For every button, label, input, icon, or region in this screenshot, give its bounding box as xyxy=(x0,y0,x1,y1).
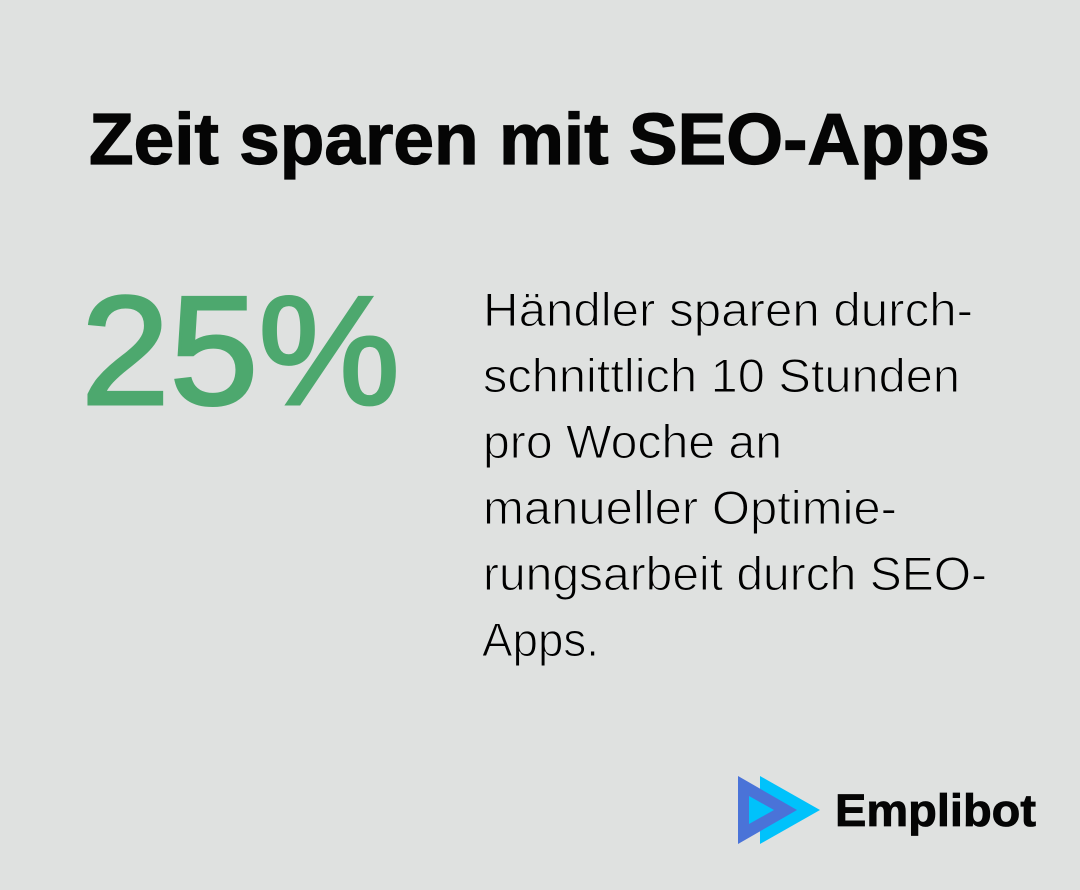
description text block xyxy=(482,283,987,666)
description text block: schnittlich 10 Stunden xyxy=(483,349,960,402)
description text block: Händler sparen durch- xyxy=(483,283,973,336)
title: Zeit sparen mit SEO-Apps xyxy=(89,100,990,180)
description text block: pro Woche an xyxy=(483,415,782,468)
big statistic: 25%: 25% xyxy=(81,264,400,437)
logo: Emplibot xyxy=(738,776,1036,844)
description text block: manueller Optimie- xyxy=(483,481,897,534)
logo wordmark: Emplibot xyxy=(835,785,1036,836)
icon: play triangles xyxy=(738,776,820,844)
description text block: rungsarbeit durch SEO- xyxy=(483,547,987,600)
description text block: Apps. xyxy=(482,613,599,666)
